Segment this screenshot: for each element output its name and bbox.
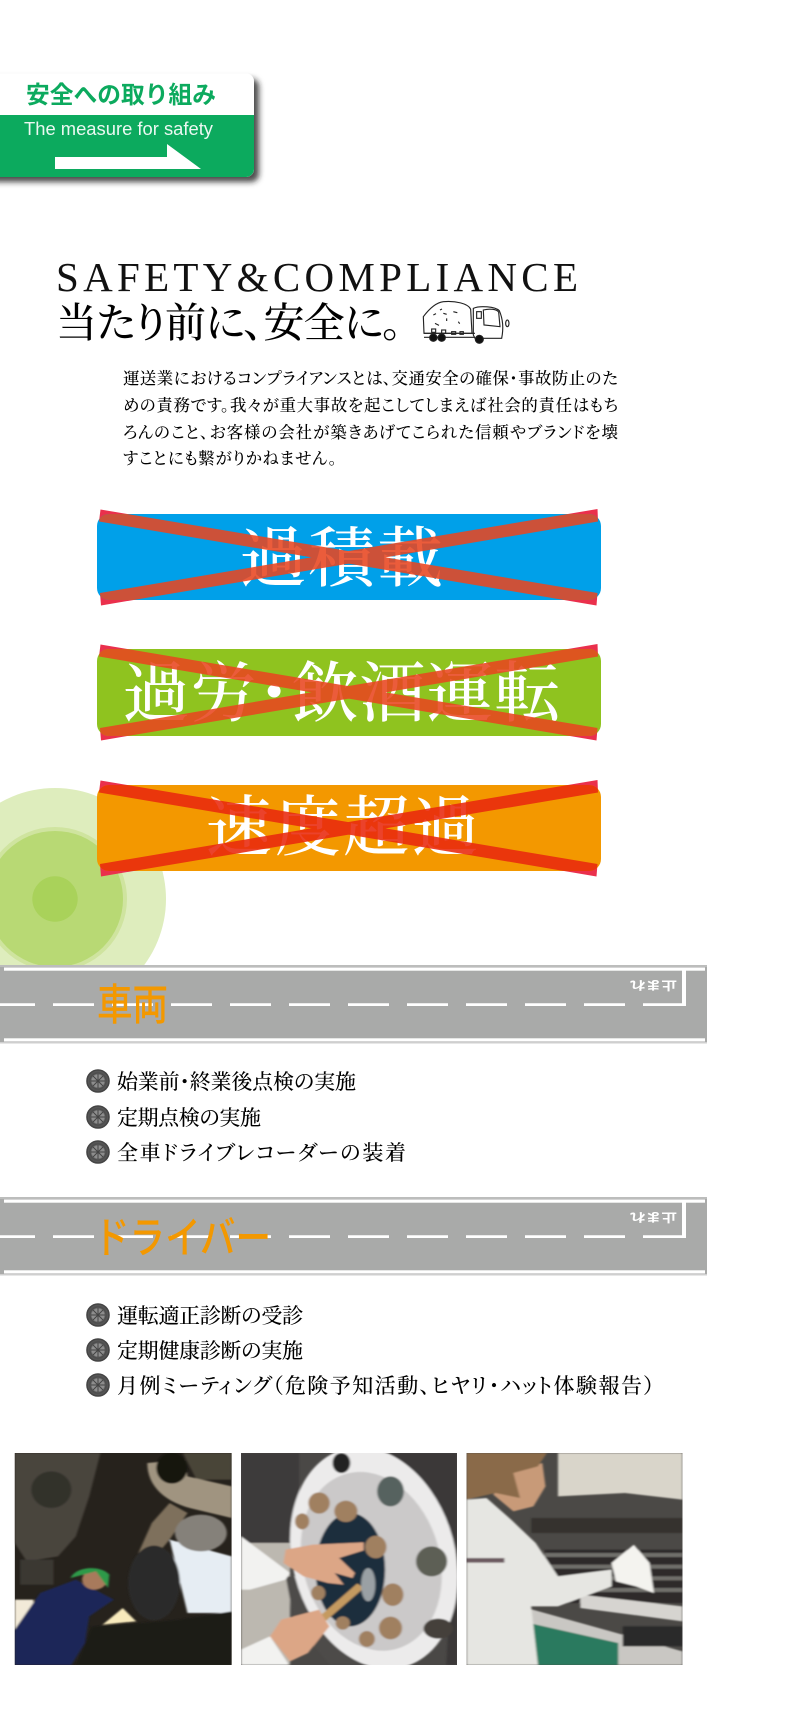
banner: overwork and drunk driving, crossed out xyxy=(97,644,601,740)
icon: tire bullet xyxy=(87,1339,109,1361)
section header tab xyxy=(0,74,254,177)
icon: tire bullet xyxy=(87,1106,109,1128)
photo: inspecting under a truck xyxy=(14,1453,232,1665)
icon: tire bullet xyxy=(87,1141,109,1163)
band heading: vehicles: 車両 xyxy=(97,982,168,1030)
road band: drivers xyxy=(0,1197,707,1276)
intro paragraph: めの責務です。我々が重大事故を起こしてしまえば社会的責任はもち xyxy=(123,396,618,415)
banner: overloading, crossed out xyxy=(97,509,601,606)
list item: 運転適正診断の受診 xyxy=(117,1304,303,1328)
icon: tire bullet xyxy=(87,1374,109,1396)
icon: truck xyxy=(423,301,509,343)
list: driver measures xyxy=(87,1304,654,1398)
heading English: SAFETY&COMPLIANCE xyxy=(56,254,578,300)
list item: 月例ミーティング（危険予知活動、ヒヤリ・ハット体験報告） xyxy=(117,1374,654,1398)
intro paragraph: すことにも繋がりかねません。 xyxy=(123,449,337,468)
list item: 定期点検の実施 xyxy=(117,1106,261,1130)
heading Japanese: 当たり前に、安全に。 xyxy=(56,300,403,346)
photo: worker checking engine oil xyxy=(466,1453,682,1665)
intro paragraph xyxy=(123,369,618,468)
header title: 安全への取り組み xyxy=(26,82,216,109)
list: vehicle measures xyxy=(87,1070,406,1165)
banner: speeding, crossed out xyxy=(97,780,601,876)
banner: speeding, crossed out: 速度超過 xyxy=(206,792,478,865)
header subtitle: The measure for safety xyxy=(24,119,213,139)
banner: overloading, crossed out: 過積載 xyxy=(240,523,443,596)
band heading: drivers: ドライバー xyxy=(94,1215,271,1263)
photo: checking wheel bolts xyxy=(241,1453,457,1665)
decorative green circles xyxy=(0,788,166,965)
road band: vehicles xyxy=(0,965,707,1044)
list item: 定期健康診断の実施 xyxy=(117,1339,303,1363)
list item: 全車ドライブレコーダーの装着 xyxy=(117,1141,406,1165)
intro paragraph: 運送業におけるコンプライアンスとは、交通安全の確保・事故防止のた xyxy=(123,369,618,388)
road marking: stop: 止まれ xyxy=(630,979,677,992)
list item: 始業前・終業後点検の実施 xyxy=(117,1070,356,1094)
icon: tire bullet xyxy=(87,1070,109,1092)
arrow xyxy=(55,144,201,169)
intro paragraph: ろんのこと、お客様の会社が築きあげてこられた信頼やブランドを壊 xyxy=(123,423,618,442)
road marking: stop: 止まれ xyxy=(630,1211,677,1224)
banner: overwork and drunk driving, crossed out: 過労・飲酒運転 xyxy=(123,658,563,731)
icon: tire bullet xyxy=(87,1304,109,1326)
tab shape xyxy=(0,74,254,177)
